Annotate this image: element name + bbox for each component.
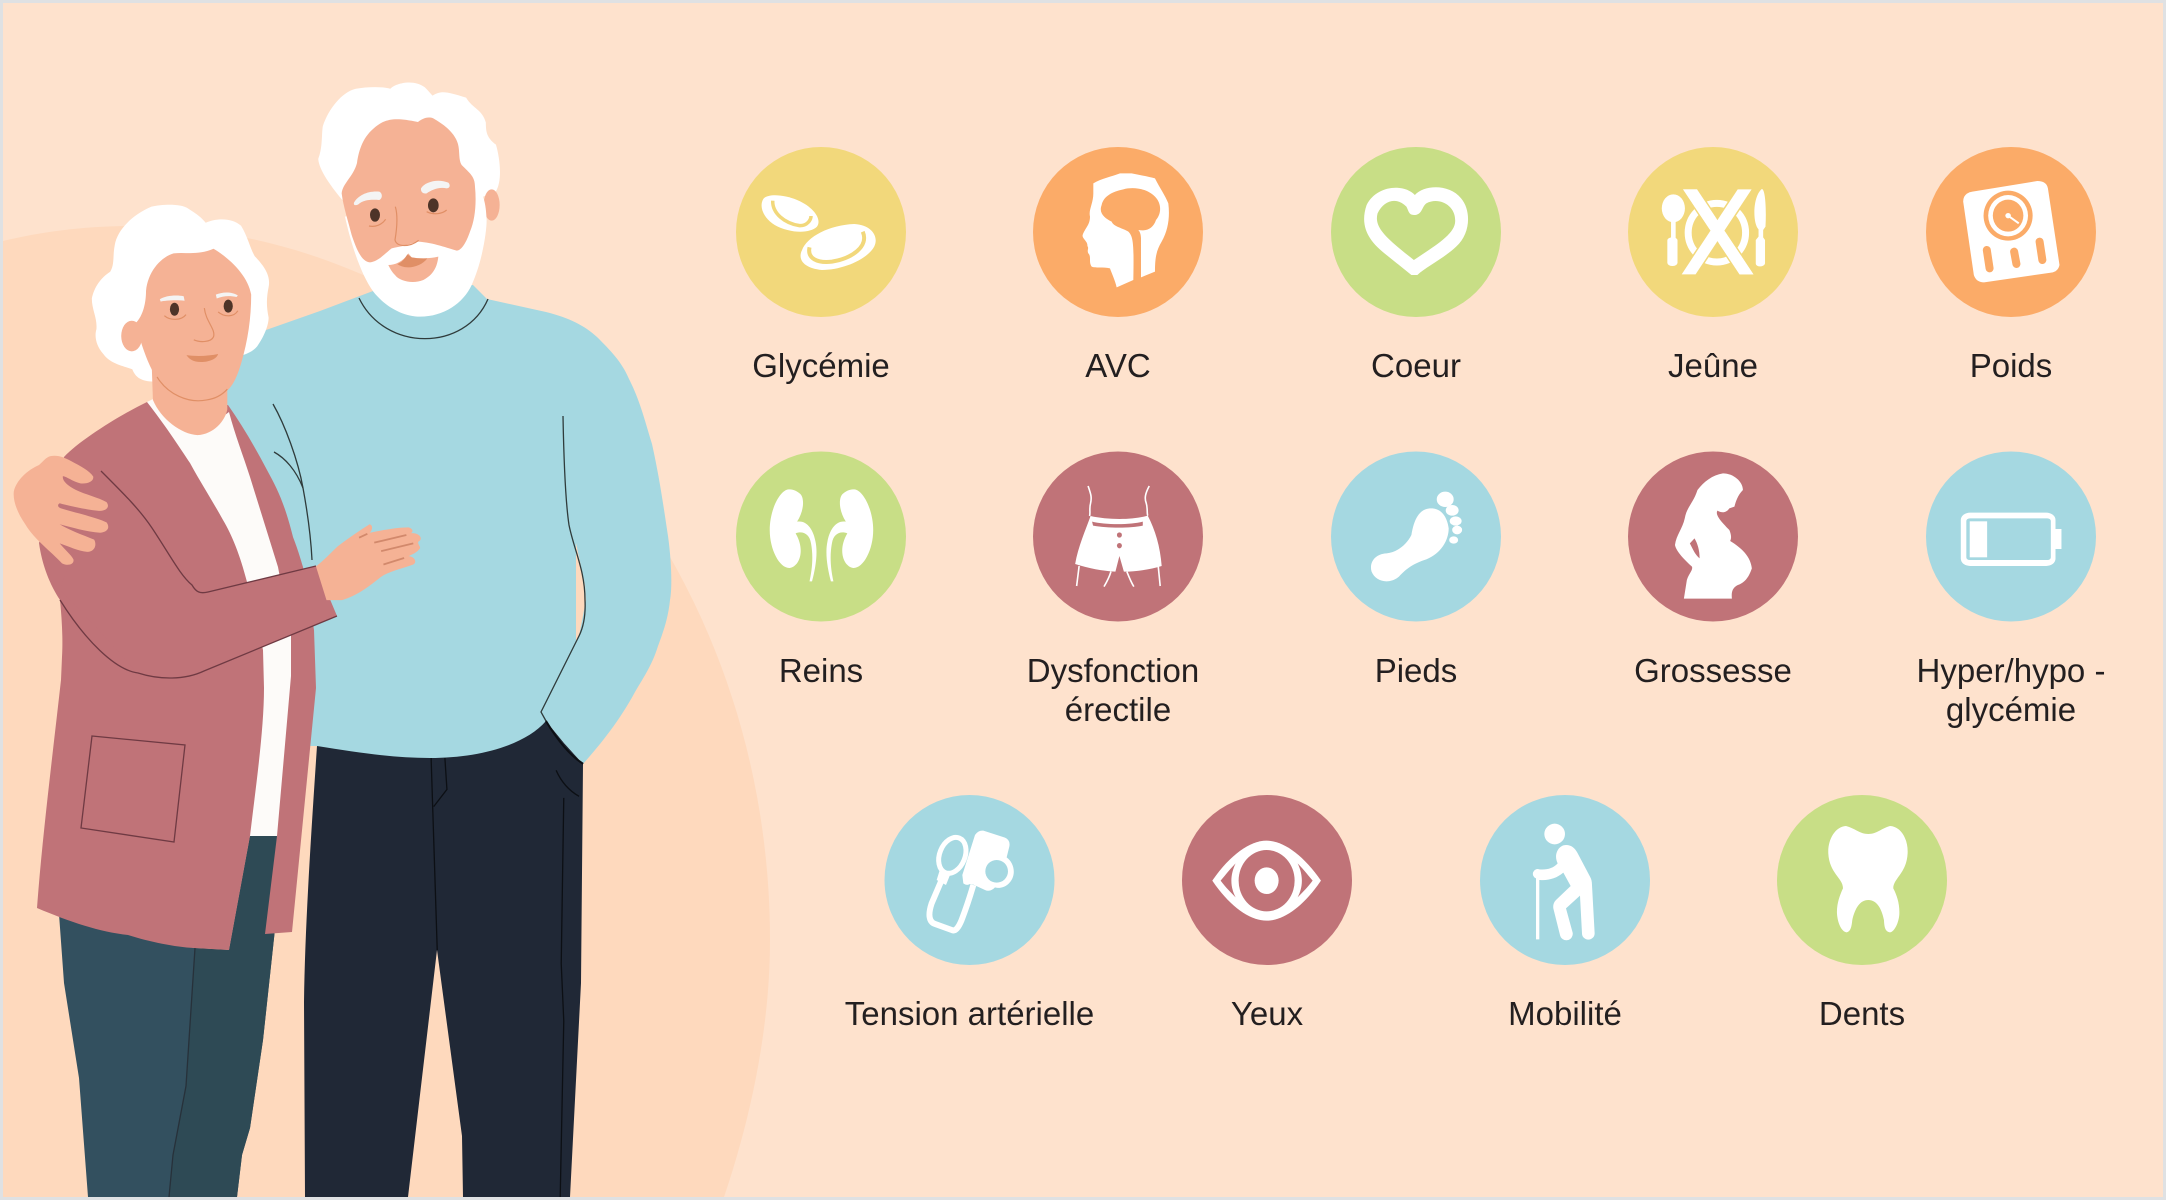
finger lines	[359, 534, 413, 564]
label: AVC	[1085, 347, 1151, 384]
man: eyes	[370, 208, 380, 222]
man: gap between arm and body	[576, 543, 586, 642]
man: hair	[318, 82, 500, 200]
icon: brain in head profile	[1033, 147, 1203, 317]
woman: eyebrows	[160, 295, 185, 302]
tile: Grossesse	[1628, 452, 1798, 689]
label: Grossesse	[1634, 652, 1792, 689]
icon: elderly person with cane	[1480, 795, 1650, 965]
label: Dysfonction	[1027, 652, 1199, 689]
woman: face	[135, 249, 251, 399]
tile: Hyper/hypo-glycémie	[1917, 452, 2105, 728]
tile: AVC	[1033, 147, 1203, 384]
icon: kidneys	[736, 452, 906, 622]
man: trouser lines	[431, 721, 583, 1197]
label: Mobilité	[1508, 995, 1622, 1032]
woman: hands	[14, 456, 421, 600]
woman: neck	[152, 360, 227, 435]
woman: head	[92, 205, 269, 435]
icon: crossed-out plate	[1628, 147, 1798, 317]
hand on man's chest	[316, 524, 421, 600]
illustration: elderly couple	[14, 82, 671, 1197]
man: facial lines	[369, 207, 447, 246]
tile: Reins	[736, 452, 906, 689]
man: mouth	[397, 254, 427, 267]
woman: jacket lines	[60, 471, 337, 842]
label: Dents	[1819, 995, 1905, 1032]
label: Tension artérielle	[845, 995, 1094, 1032]
man: head	[342, 118, 500, 317]
woman: jacket sleeve	[60, 471, 337, 679]
icon: heart	[1331, 147, 1501, 317]
woman: facial lines	[157, 308, 238, 401]
tile: Poids	[1926, 147, 2096, 384]
label: Hyper/hypo -	[1917, 652, 2105, 689]
label line 2: érectile	[1065, 691, 1171, 728]
tile: Dents	[1777, 795, 1947, 1032]
woman: eyes	[170, 303, 179, 316]
tile: Pieds	[1331, 452, 1501, 689]
icon: bathroom scale	[1926, 147, 2096, 317]
label: Glycémie	[752, 347, 890, 384]
tile: Dysfonction érectile	[1027, 452, 1203, 728]
man: chin	[388, 253, 438, 282]
tile: Tension artérielle	[845, 795, 1094, 1032]
man: garment lines	[273, 298, 585, 721]
icon: blood cells	[736, 147, 906, 317]
woman: hair	[92, 205, 269, 383]
icon: pregnant silhouette	[1628, 452, 1798, 622]
tile: Coeur	[1331, 147, 1501, 384]
icon: low battery	[1926, 452, 2096, 622]
woman: trouser crease	[169, 948, 195, 1197]
tile: Mobilité	[1480, 795, 1650, 1032]
woman: trousers shaded leg	[169, 835, 278, 1197]
woman: trousers	[59, 835, 278, 1197]
woman: mouth	[186, 354, 218, 362]
woman: jacket	[37, 402, 316, 950]
man: eyebrows	[354, 192, 382, 205]
tile: Jeûne	[1628, 147, 1798, 384]
label: Yeux	[1231, 995, 1304, 1032]
tile: Glycémie	[736, 147, 906, 384]
icon: boxer shorts	[1033, 452, 1203, 622]
man: beard	[345, 183, 487, 317]
man: sweater	[220, 285, 671, 764]
woman: ear	[121, 321, 142, 351]
tile: Yeux	[1182, 795, 1352, 1032]
icon: footprint	[1331, 452, 1501, 622]
label: Poids	[1970, 347, 2052, 384]
man: ear	[484, 189, 500, 221]
label: Jeûne	[1668, 347, 1758, 384]
man: face	[342, 118, 476, 262]
label: Reins	[779, 652, 863, 689]
icon: blood pressure cuff	[884, 795, 1054, 965]
label: Coeur	[1371, 347, 1461, 384]
background blob	[3, 226, 770, 1197]
label: Pieds	[1375, 652, 1457, 689]
hand on shoulder	[14, 456, 108, 565]
icon: tooth	[1777, 795, 1947, 965]
man: trousers	[304, 721, 583, 1197]
label line 2: glycémie	[1946, 691, 2076, 728]
icon: eye	[1182, 795, 1352, 965]
woman: shirt	[147, 399, 291, 836]
